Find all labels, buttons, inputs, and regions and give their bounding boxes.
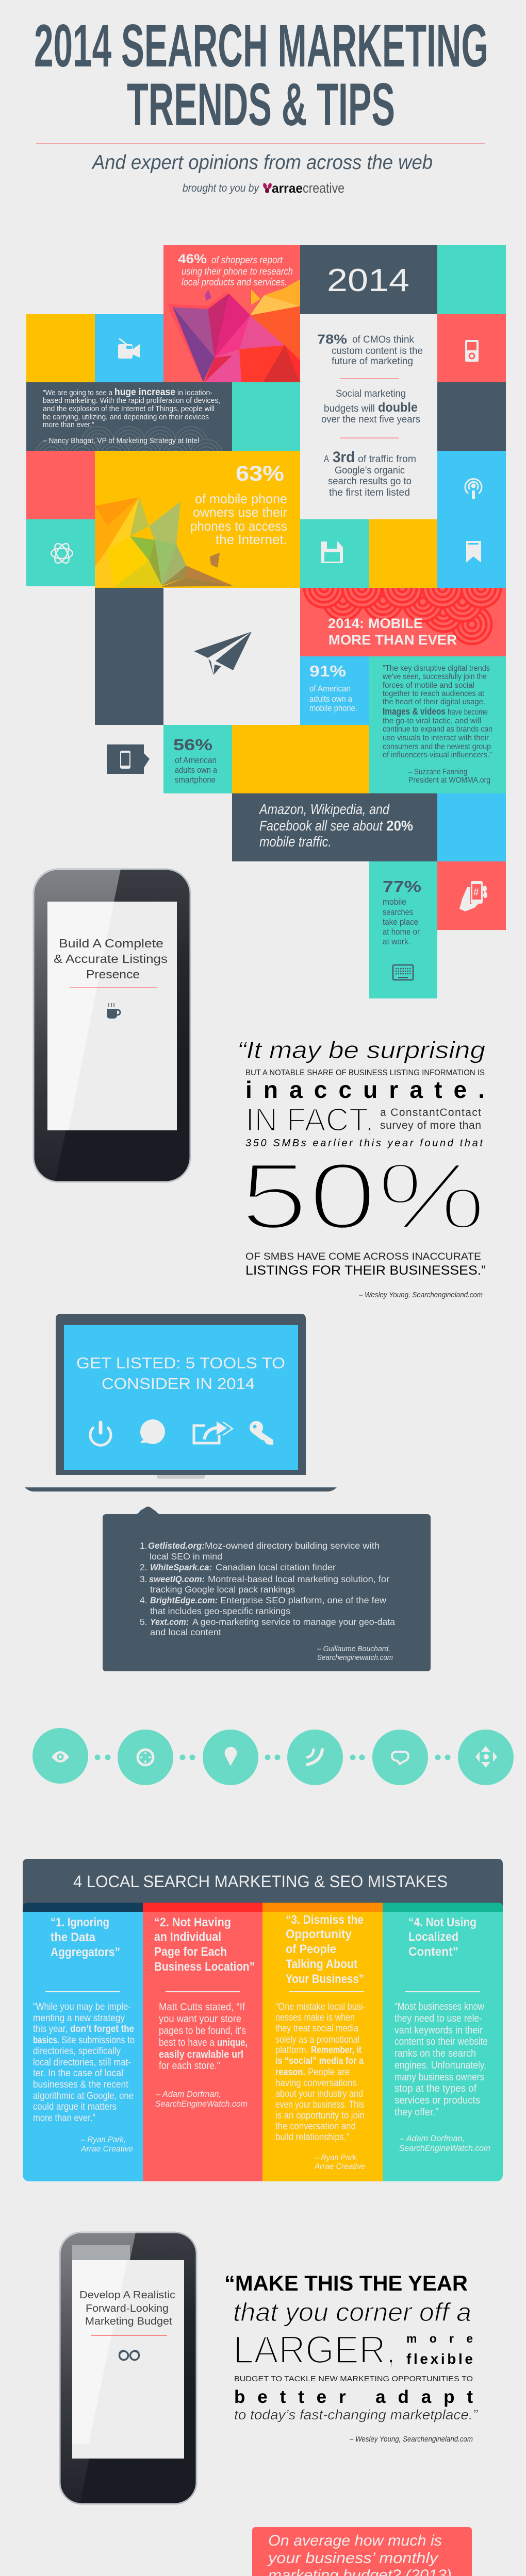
heading: 5 tools: CONSIDER IN 2014 — [102, 1375, 255, 1393]
column 1: data aggregators: menting a new strategy — [33, 2013, 125, 2024]
tile: blue with camera — [95, 314, 163, 382]
icon: hand holding phone: # — [473, 887, 479, 898]
icon: keyboard — [393, 965, 413, 980]
column 4: localized content: “4. Not Using — [408, 1916, 476, 1929]
panel: 77 percent: at work. — [383, 937, 410, 946]
phone: build listings — [34, 869, 190, 1182]
tile: teal beside quote — [232, 382, 300, 451]
brought to you by — [183, 180, 344, 196]
panel: 77 percent: at home or — [383, 927, 420, 937]
panel: 56 percent: smartphone — [175, 775, 216, 785]
panel: Suzzane Fanning quote: forces of mobile and social — [383, 681, 474, 690]
panel: 91 percent: adults own a — [309, 694, 352, 704]
column 1: data aggregators: basics. — [33, 2035, 59, 2046]
panel: Suzzane Fanning quote: – Suzzane Fanning — [408, 768, 467, 776]
column 2: individual page — [143, 1912, 262, 2181]
column 4: localized content: engines. Unfortunately, — [395, 2060, 486, 2071]
panel: Suzzane Fanning quote: the go-to viral tactic, and will — [383, 717, 481, 725]
icon: atom — [51, 541, 73, 565]
quote: listings inaccurate: – Wesley Young, Searchengineland.com — [358, 1291, 483, 1299]
quote: make this the year: – Wesley Young, Searchengineland.com — [349, 2435, 473, 2444]
column 2: individual page: best to have a — [159, 2037, 215, 2048]
column 4: localized content: they offer.” — [395, 2107, 438, 2118]
column 4: localized content: services or products — [395, 2095, 480, 2106]
column 3: social opportunity: Arrae Creative — [314, 2162, 365, 2171]
panel: 63 percent: the Internet. — [216, 532, 287, 547]
column 1: data aggregators: more than ever.” — [33, 2113, 95, 2124]
panel: 91 percent: mobile phone. — [309, 703, 357, 713]
panel: 91 percent: 91% — [309, 662, 346, 680]
quote: make this the year: better adapt — [234, 2387, 473, 2407]
heading: build listings: Presence — [86, 968, 140, 981]
column 1: data aggregators: – Ryan Park, — [80, 2136, 126, 2144]
tile: blue — [437, 793, 506, 861]
title rule — [36, 143, 485, 144]
column 4: localized content: ranks on the search — [395, 2048, 476, 2059]
panel: Suzzane Fanning quote: use visuals to interact with their — [383, 734, 489, 742]
column 3: social opportunity: the conversation and — [275, 2121, 356, 2132]
heading: marketing budget — [79, 2290, 175, 2327]
column 4: localized content: – Adam Dorfman, — [399, 2133, 465, 2143]
column 3: social opportunity: “One mistake local busi- — [275, 2002, 366, 2012]
phone: marketing budget — [60, 2232, 196, 2504]
panel: Amazon Wikipedia Facebook: 20% — [386, 818, 413, 834]
column 2: individual page: “2. Not Having — [154, 1916, 231, 1929]
panel: Nancy Bhagat quote — [26, 382, 232, 451]
panel: Nancy Bhagat quote: huge increase — [114, 387, 175, 398]
column 1: data aggregators: Arrae Creative — [80, 2145, 133, 2154]
panel: tools list: BrightEdge.com: — [150, 1595, 218, 1605]
panel: stats column: custom content is the — [332, 346, 423, 357]
quote: make this the year: that you corner off a — [233, 2298, 471, 2327]
icon: share — [194, 1421, 233, 1443]
column 3: social opportunity: is “social” media for a — [275, 2056, 364, 2066]
column 1: data aggregators: don’t forget the — [70, 2024, 134, 2035]
panel: Amazon Wikipedia Facebook — [232, 793, 437, 861]
icon: music player — [465, 340, 479, 362]
brought to you by: brought to you by — [183, 182, 259, 194]
panel: tools list: 3. — [140, 1574, 147, 1584]
quote: make this the year: flexible — [406, 2351, 473, 2367]
mosaic grid — [26, 245, 506, 998]
panel: stats column: future of marketing — [332, 356, 413, 367]
column 3: social opportunity: nesses make is when — [275, 2012, 355, 2023]
icon: key — [250, 1421, 273, 1445]
column 2: individual page: SearchEngineWatch.com — [155, 2099, 248, 2109]
icon: eye — [52, 1751, 69, 1762]
column 3: social opportunity: Remember, it — [311, 2045, 362, 2056]
text: 46 percent of shoppers: local products and services. — [182, 277, 287, 288]
quote: make this the year: to today’s fast-changing marketplace.” — [234, 2407, 478, 2422]
panel: Suzzane Fanning quote: have become — [448, 708, 488, 717]
column 3: social opportunity: is an opportunity to join — [275, 2110, 365, 2121]
quote: listings inaccurate: IN FACT, — [245, 1102, 374, 1138]
panel: tools list: Searchenginewatch.com — [317, 1654, 393, 1662]
column 1: data aggregators: local directories, still mat- — [33, 2057, 131, 2068]
quote: listings inaccurate — [237, 1037, 486, 1299]
heading: build listings: Build A Complete — [59, 937, 163, 950]
column 1: data aggregators: “1. Ignoring — [51, 1916, 109, 1929]
text: 46 percent of shoppers: 46% — [178, 252, 207, 266]
tile: coral with ipod — [437, 314, 506, 382]
panel: tools list — [103, 1506, 431, 1671]
column 4: localized content: Localized — [408, 1930, 458, 1944]
column 2: individual page: for each store." — [159, 2060, 220, 2072]
quote: make this the year: BUDGET TO TACKLE NEW MARKETING OPPORTUNITIES TO — [234, 2375, 473, 2383]
column 1: data aggregators: directories, specifically — [33, 2046, 121, 2057]
column 2: individual page: Business Location” — [154, 1960, 255, 1974]
heading: build listings: & Accurate Listings — [54, 952, 168, 965]
panel: tools list: Enterprise SEO platform, one of the few — [220, 1595, 386, 1605]
tile: teal with floppy — [300, 519, 369, 588]
column 2: individual page: Page for Each — [154, 1945, 227, 1959]
quote: make this the year — [224, 2271, 478, 2444]
icon: video camera — [118, 338, 140, 359]
column 2: individual page: easily crawlable url — [159, 2049, 243, 2060]
quote: listings inaccurate: a ConstantContact — [380, 1107, 481, 1118]
title — [34, 12, 488, 138]
column 4: localized content: stop at the types of — [395, 2083, 476, 2094]
panel: Nancy Bhagat quote: be carrying, utilizing, and depending on their devices — [43, 413, 209, 421]
column 4: localized content: vant keywords in their — [395, 2025, 483, 2036]
icon: floppy disk — [321, 541, 343, 563]
icon: signal — [465, 479, 482, 499]
text: 46 percent of shoppers: of shoppers report — [211, 255, 283, 266]
column 3: social opportunity: they treat social media — [275, 2023, 358, 2034]
column 3: social opportunity: of People — [286, 1942, 336, 1956]
quote: listings inaccurate: LISTINGS FOR THEIR BUSINESSES.” — [245, 1263, 486, 1278]
panel: 56 percent — [163, 725, 232, 793]
quote: listings inaccurate: survey of more than — [380, 1120, 481, 1131]
heading: build listings — [54, 937, 168, 981]
heading: 5 tools: GET LISTED: 5 TOOLS TO — [76, 1354, 285, 1372]
panel: 63 percent: phones to access — [190, 518, 287, 534]
column 2: individual page: you want your store — [159, 2013, 241, 2025]
panel: Suzzane Fanning quote: continue to expand as brands can — [383, 725, 492, 734]
icon: glasses — [119, 2350, 139, 2360]
column 3: social opportunity: – Ryan Park, — [314, 2154, 358, 2162]
panel: 91 percent: of American — [309, 684, 351, 693]
column 3: social opportunity: Talking About — [286, 1957, 357, 1971]
tile: 2014 — [300, 245, 437, 314]
tile: coral with hand icon — [437, 861, 506, 930]
icon: rss — [307, 1750, 322, 1765]
laptop: get listed — [25, 1314, 337, 1492]
column 4: localized content: many business owners — [395, 2072, 484, 2083]
callout: budget question: On average how much is — [268, 2532, 442, 2549]
panel: tools list: 1. — [140, 1540, 147, 1551]
heading: marketing budget: Marketing Budget — [85, 2316, 172, 2327]
panel: Suzzane Fanning quote: "The key disruptive digital trends — [383, 664, 490, 673]
panel: Amazon Wikipedia Facebook: Facebook all see about — [259, 818, 383, 834]
text: 46 percent of shoppers — [178, 252, 293, 288]
column 3: social opportunity — [262, 1912, 383, 2181]
heading: marketing budget: Forward-Looking — [86, 2303, 169, 2314]
panel: stats column: search results go to — [328, 476, 412, 487]
panel: Suzzane Fanning quote: Images & videos — [383, 706, 446, 717]
column 4: localized content: “Most businesses know — [395, 2001, 484, 2012]
column band colors — [23, 1903, 503, 1912]
panel: 63 percent: owners use their — [193, 504, 287, 520]
quote: listings inaccurate: BUT A NOTABLE SHARE OF BUSINESS LISTING INFORMATION IS — [245, 1069, 485, 1077]
panel: Nancy Bhagat quote: more than ever." — [43, 420, 94, 429]
tile: yellow — [26, 314, 95, 382]
column 3: social opportunity: even your business. This — [275, 2099, 364, 2110]
column 4: localized content: they need to use rele- — [395, 2013, 482, 2024]
panel: 63 percent: 63% — [236, 461, 284, 485]
tile: dark column — [95, 588, 163, 725]
panel: Nancy Bhagat quote: "We are going to see a — [43, 388, 113, 397]
column 1: data aggregators: algorithmic at Google, one — [33, 2091, 134, 2102]
panel: 56 percent: 56% — [173, 736, 212, 754]
quote: listings inaccurate: “It may be surprising — [237, 1037, 485, 1063]
column 3: social opportunity: build relationships.” — [275, 2132, 349, 2143]
panel: 56 percent: of American — [175, 755, 217, 765]
panel: tools list: A geo-marketing service to manage your geo-data — [192, 1617, 395, 1627]
panel: 2014 mobile more than ever — [300, 588, 506, 656]
column 1: data aggregators: businesses & the recent — [33, 2079, 129, 2090]
column 4: localized content: content so their website — [395, 2036, 488, 2047]
panel: 2014 mobile more than ever: 2014: MOBILE — [328, 616, 423, 631]
panel: 4 local search mistakes — [23, 1859, 503, 2181]
panel: stats column: of traffic from — [358, 454, 416, 465]
tile: coral with polygon art — [163, 245, 300, 382]
panel: Amazon Wikipedia Facebook: Amazon, Wikipedia, and — [258, 801, 390, 817]
icon: power — [90, 1422, 111, 1445]
panel: 91 percent — [300, 656, 369, 725]
panel: 63 percent — [95, 451, 300, 588]
icon: phone tag — [107, 744, 150, 774]
tile: teal top right — [437, 245, 506, 314]
column 2: individual page: an Individual — [154, 1930, 221, 1944]
panel: tools list: tracking Google local pack rankings — [150, 1584, 295, 1595]
panel: Suzzane Fanning quote: consumers and the newest group — [383, 742, 491, 751]
column 3: social opportunity: about your industry and — [275, 2089, 363, 2099]
column 3: social opportunity: reason. — [275, 2067, 305, 2078]
panel: stats column: the first item listed — [329, 487, 410, 498]
tile: blue with signal and bookmark — [437, 451, 506, 588]
icon: move arrows — [475, 1746, 497, 1768]
panel: tools list: Canadian local citation finder — [216, 1562, 336, 1572]
tile: yellow — [232, 725, 369, 793]
panel: tools list: 2. — [140, 1562, 147, 1572]
panel: Nancy Bhagat quote: in location- — [177, 388, 212, 397]
panel: tools list: – Guillaume Bouchard, — [317, 1645, 390, 1653]
panel: tools list: 5. — [140, 1617, 147, 1627]
panel: Nancy Bhagat quote: – Nancy Bhagat, VP of Marketing Strategy at Intel — [43, 436, 199, 445]
panel: tools list: that includes geo-specific rankings — [150, 1606, 290, 1616]
panel: stats column: Social marketing — [336, 388, 406, 399]
column 3: social opportunity: solely as a promotional — [275, 2035, 359, 2045]
panel: Suzzane Fanning quote: the heart of their digital usage. — [383, 698, 485, 706]
column 4: localized content — [383, 1912, 503, 2181]
icon: chat bubble — [140, 1419, 165, 1444]
column 2: individual page: – Adam Dorfman, — [155, 2089, 221, 2099]
panel: tools list: WhiteSpark.ca: — [150, 1562, 212, 1572]
heading: 5 tools — [76, 1354, 285, 1393]
panel: Suzzane Fanning quote: President at WOMMA.org — [408, 776, 490, 785]
tile: coral — [26, 451, 95, 519]
quote: listings inaccurate: inaccurate. — [245, 1076, 485, 1103]
panel: Suzzane Fanning quote — [369, 656, 506, 793]
panel: Suzzane Fanning quote: of influencers-visual influencers." — [383, 751, 492, 759]
panel: 77 percent: take place — [383, 917, 418, 927]
quote: make this the year: “MAKE THIS THE YEAR — [224, 2271, 468, 2295]
heading: mistakes: 4 LOCAL SEARCH MARKETING & SEO MISTAKES — [73, 1872, 448, 1891]
heading: marketing budget: Develop A Realistic — [79, 2290, 175, 2301]
column 2: individual page: pages to be found, it’s — [159, 2025, 246, 2037]
icon: crosshair — [138, 1750, 153, 1765]
column 3: social opportunity: People are — [308, 2067, 350, 2078]
column 3: social opportunity: having conversations — [275, 2078, 357, 2089]
column 1: data aggregators: “While you may be imple- — [33, 2002, 131, 2012]
panel: stats column: of CMOs think — [352, 334, 414, 345]
column 1: data aggregators: this year, — [33, 2024, 68, 2035]
subtitle: And expert opinions from across the web — [91, 151, 433, 174]
column 1: data aggregators: Aggregators” — [51, 1945, 120, 1959]
icon: paper plane — [194, 632, 252, 675]
icon: map pin — [225, 1747, 237, 1766]
column 3: social opportunity: “3. Dismiss the — [286, 1913, 364, 1927]
icon row: teal circles — [32, 1728, 514, 1785]
quote: listings inaccurate: 50% — [240, 1143, 486, 1249]
text: 46 percent of shoppers: using their phone to research — [182, 266, 293, 277]
column 1: data aggregators — [23, 1912, 143, 2181]
column 3: social opportunity: Opportunity — [286, 1927, 352, 1941]
panel: Nancy Bhagat quote: based marketing. With the rapid proliferation of devices, — [43, 396, 220, 405]
callout: budget question — [252, 2527, 472, 2576]
panel: 56 percent: adults own a — [175, 765, 217, 775]
panel: tools list: Moz-owned directory building service with — [205, 1540, 380, 1551]
column 1: data aggregators: could argue it matters — [33, 2102, 117, 2112]
tile: 2014: 2014 — [327, 263, 409, 298]
quote: listings inaccurate: OF SMBS HAVE COME ACROSS INACCURATE — [245, 1251, 481, 1262]
panel: tools list: Getlisted.org: — [148, 1540, 205, 1551]
tile: dark — [437, 382, 506, 451]
quote: listings inaccurate: 350 SMBs earlier this year found that — [245, 1138, 483, 1149]
column 1: data aggregators: the Data — [51, 1930, 96, 1944]
panel: tools list: 4. — [140, 1595, 147, 1605]
tile: teal with atom — [26, 519, 95, 586]
panel: Suzzane Fanning quote: together to reach audiences at — [383, 689, 485, 698]
icon: bookmark — [466, 541, 481, 563]
panel: tools list: Montreal-based local marketing solution, for — [208, 1574, 389, 1584]
panel: stats column: double — [378, 400, 418, 415]
callout: budget question: your business’ monthly — [267, 2550, 439, 2567]
quote: make this the year: LARGER, — [233, 2328, 396, 2372]
tile: yellow — [369, 519, 437, 588]
column 4: localized content: SearchEngineWatch.com — [399, 2143, 490, 2153]
column 1: data aggregators: ter. In the case of local — [33, 2068, 123, 2079]
panel: tools list: Yext.com: — [150, 1617, 189, 1627]
panel: Amazon Wikipedia Facebook: mobile traffic. — [259, 834, 332, 850]
panel: stats column — [317, 332, 423, 498]
brought to you by: arrae — [272, 180, 303, 196]
panel: Nancy Bhagat quote: and the explosion of the Internet of Things, people will — [43, 404, 215, 413]
column 1: data aggregators: Site submissions to — [61, 2035, 135, 2046]
panel: 77 percent — [369, 861, 437, 998]
panel: 77 percent: 77% — [383, 877, 421, 895]
panel: stats column: Google’s organic — [335, 465, 405, 476]
icon: coffee mug — [107, 1003, 120, 1019]
quote: make this the year: more — [406, 2332, 473, 2345]
brought to you by: creative — [303, 180, 344, 196]
column 2: individual page: unique, — [217, 2037, 248, 2048]
icon: speech outline — [392, 1752, 408, 1764]
column 3: social opportunity: platform. — [275, 2045, 308, 2056]
panel: stats column: A — [324, 454, 329, 465]
panel: 63 percent: of mobile phone — [195, 491, 287, 506]
panel: stats column: 78% — [317, 332, 347, 347]
icon: arrae logo flower — [262, 182, 272, 193]
panel: Suzzane Fanning quote: we've seen, successfully join the — [382, 672, 487, 681]
panel: stats column: over the next five years — [321, 414, 420, 425]
panel: tools list: local SEO in mind — [150, 1551, 222, 1562]
panel: tools list: and local content — [150, 1627, 221, 1637]
panel: 77 percent: mobile — [383, 897, 406, 907]
column 3: social opportunity: Your Business” — [286, 1972, 364, 1986]
panel: stats column: 3rd — [333, 449, 355, 466]
panel: tools list: sweetIQ.com: — [149, 1574, 205, 1584]
column 2: individual page: Matt Cutts stated, “If — [159, 2002, 245, 2013]
panel: stats column: budgets will — [324, 403, 375, 414]
panel: 77 percent: searches — [383, 907, 413, 917]
column 4: localized content: Content” — [408, 1945, 458, 1959]
panel: 2014 mobile more than ever: MORE THAN EVER — [328, 632, 457, 648]
